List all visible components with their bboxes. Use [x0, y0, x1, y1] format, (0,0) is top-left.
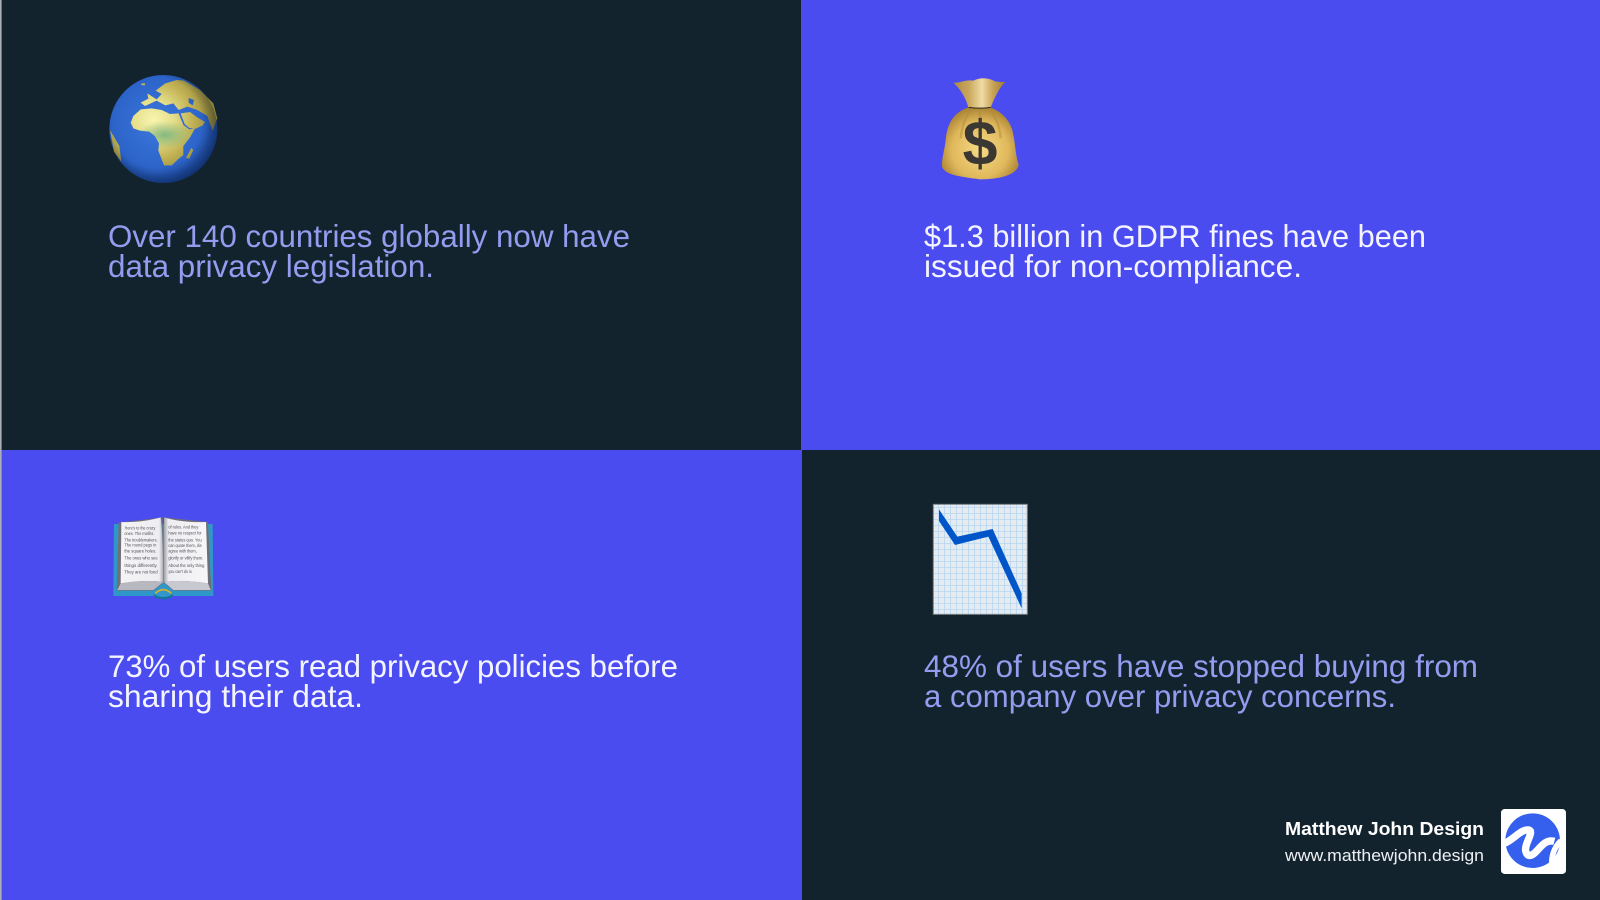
icon: falling chart [933, 504, 1027, 614]
icon: open book: can quote them, dis [168, 543, 202, 549]
icon: open book: have no respect for [168, 531, 202, 537]
panel: GDPR fines [801, 0, 1600, 450]
stat text: GDPR fines: issued for non-compliance. [924, 248, 1302, 284]
stat text: GDPR fines: $1.3 billion in GDPR fines have been [924, 218, 1426, 254]
footer: brand credit [1284, 809, 1566, 874]
icon: open book [113, 517, 213, 599]
icon: open book: They are not fond [124, 569, 158, 575]
stat text: policy readers: 73% of users read privacy policies before [108, 648, 678, 684]
icon: money bag: $ [963, 109, 997, 179]
brand name: Matthew John Design [1285, 818, 1484, 839]
icon: open book: The round pegs in [124, 543, 157, 549]
brand website: www.matthewjohn.design [1284, 847, 1484, 865]
stat text: GDPR fines [924, 218, 1426, 284]
icon: open book: The troublemakers. [124, 538, 158, 544]
icon: open book: About the only thing [168, 563, 205, 569]
icon: globe [109, 75, 217, 183]
icon: open book: the status quo. You [168, 537, 202, 543]
icon: open book: the square holes. [124, 549, 156, 555]
stat text: countries with legislation [108, 218, 630, 284]
icon: open book: agree with them, [168, 548, 197, 554]
icon: open book: you can't do is [168, 569, 192, 575]
stat text: stopped buying [924, 648, 1478, 714]
icon: open book: of rules. And they [168, 525, 199, 531]
panel: stopped buying [802, 450, 1600, 900]
panel: global legislation [109, 75, 629, 284]
panel: privacy policy readers [0, 450, 802, 900]
stat text: stopped buying: a company over privacy concerns. [924, 678, 1396, 714]
stat text: countries with legislation: data privacy legislation. [108, 248, 434, 284]
icon: open book: glorify or vilify them. [168, 556, 203, 562]
stat text: policy readers: sharing their data. [108, 678, 363, 714]
logo [1501, 809, 1566, 874]
stat text: countries with legislation: Over 140 countries globally now have [108, 218, 630, 254]
stat text: policy readers [108, 648, 678, 714]
icon: open book: ones. The misfits. [124, 531, 154, 537]
left edge strip [0, 0, 2, 900]
icon: open book: Here's to the crazy [125, 525, 156, 531]
icon: open book: things differently. [124, 563, 158, 569]
icon: money bag [942, 78, 1019, 179]
icon: open book: The ones who see [124, 555, 158, 561]
stat text: stopped buying: 48% of users have stopped buying from [924, 648, 1478, 684]
